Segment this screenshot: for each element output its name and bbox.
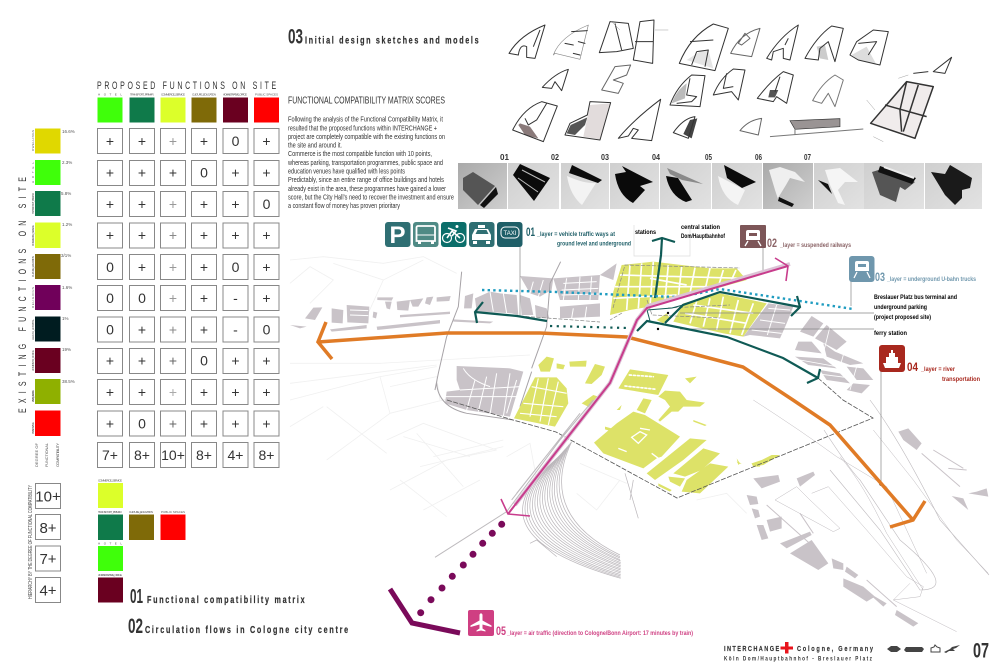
label: layer 01: ground level and underground	[557, 240, 631, 248]
hierarchy score boxes: 7+	[39, 551, 57, 568]
hierarchy score boxes: HIERARCHY BY THE DEGREE OF FUNCTIONAL COMPATIBILITY	[28, 485, 34, 599]
existing function swatches	[31, 128, 75, 467]
compatibility matrix: ++ + +0+	[106, 133, 271, 149]
base map: grey blocks south-east and east	[743, 303, 873, 393]
icon: bicycle	[441, 222, 466, 247]
leader lines	[519, 225, 883, 486]
design sketches	[509, 20, 952, 142]
existing function swatches: 1%	[62, 316, 69, 321]
label: layer 02: 02	[767, 236, 777, 250]
label: layer 01	[526, 225, 631, 248]
existing function swatches: 2.3%	[62, 160, 72, 165]
matrix scores paragraph: a constant flow of money has proven prioritary	[288, 201, 400, 210]
model numbers: 02	[551, 153, 559, 162]
section title 02	[128, 615, 348, 638]
compatibility matrix: +0 + +++	[106, 416, 271, 432]
footer transport icons	[887, 645, 960, 653]
label: layer 03: 03	[875, 270, 885, 284]
hierarchy score boxes	[28, 484, 61, 602]
compatibility matrix: 4+	[228, 447, 243, 463]
model numbers: 07	[804, 153, 811, 162]
label: central station	[681, 225, 726, 240]
compatibility matrix: ++ + 0++	[106, 352, 271, 368]
section title 02: Circulation flows in Cologne city centre	[145, 624, 348, 635]
ranked function swatches: COMMERCE_SERVICE	[98, 478, 122, 482]
icon: red cross	[780, 642, 793, 654]
existing function swatches: DEGREE OF	[34, 442, 39, 467]
model photos strip	[458, 163, 982, 209]
icon: underground train	[849, 256, 874, 282]
compatibility matrix: ++ + +++	[106, 227, 271, 243]
compatibility matrix: 7+	[102, 447, 118, 463]
label: layer 04	[907, 360, 980, 383]
heading: proposed functions on site: PROPOSED FUNCTIONS ON SITE	[97, 79, 276, 93]
existing function swatches: HEALTH_HOSPITAL	[31, 319, 35, 340]
model numbers: 03	[601, 153, 609, 162]
icon: suspended railway	[740, 225, 766, 248]
icon: parking: P	[389, 222, 406, 249]
model numbers: 06	[755, 153, 762, 162]
icon: ship	[879, 345, 905, 372]
proposed function swatches	[98, 92, 279, 122]
label: Breslauer Platz: underground parking	[874, 304, 927, 311]
proposed function swatches: TRANSPORT_PRIMAR.	[130, 92, 155, 96]
footer project title	[724, 642, 873, 663]
existing function swatches: CULTURE_EDUCATION	[31, 256, 35, 277]
existing function swatches: 1.6%	[62, 285, 72, 290]
icon: taxi sign: TAXI	[504, 231, 517, 237]
proposed function swatches: PUBLIC SPACES	[255, 92, 278, 96]
label: central station: central station	[681, 225, 720, 231]
matrix scores paragraph: Predictably, since an entire range of office buildings and hotels	[288, 175, 444, 184]
existing function swatches: COMMERCE_SERVICE	[31, 225, 35, 246]
matrix scores paragraph: Following the analysis of the Functional Compatibility Matrix, it	[288, 114, 443, 124]
compatibility matrix: +++0++	[106, 164, 271, 180]
ranked function swatches	[98, 478, 186, 602]
label: layer 01: 01	[526, 225, 535, 239]
base map: yellow zones	[514, 262, 780, 493]
compatibility matrix: 8+	[259, 447, 274, 463]
compatibility matrix: ++ + ++0	[106, 196, 271, 212]
existing function swatches: H O T E L	[31, 162, 35, 183]
compatibility matrix: 8+	[134, 447, 150, 463]
matrix scores paragraph: education venues have qualified with less points	[288, 167, 405, 176]
existing function swatches: DWELLINGS	[31, 130, 35, 151]
heading: existing functions on site: EXISTING FUNCTIONS ON SITE	[16, 177, 30, 413]
existing function swatches: 16.6%	[62, 129, 75, 134]
section title 01: 01	[130, 586, 143, 608]
hierarchy score boxes: 4+	[39, 582, 57, 600]
model numbers	[500, 153, 811, 162]
ranked function swatches: TRANSPORT_PRIMAR.	[98, 510, 123, 514]
label: layer 05: 05	[496, 624, 506, 638]
existing function swatches: 5.8%	[61, 191, 71, 196]
label: layer 03	[875, 270, 976, 284]
compatibility matrix: 10+	[161, 447, 185, 463]
icon: airplane	[468, 610, 494, 636]
label: ferry station: ferry station	[874, 330, 907, 337]
label: layer 05: _layer = air traffic (direction to Cologne/Bonn Airport: 17 minutes by train)	[506, 630, 693, 637]
existing function swatches: COMPATIBILITY	[55, 443, 60, 467]
compatibility matrix: 0+ + +0+	[106, 259, 271, 275]
icon: bus	[413, 222, 438, 247]
model numbers: 01	[500, 153, 510, 162]
section title 02: 02	[128, 615, 143, 638]
base map: dashed city boundary and river edge	[447, 265, 989, 590]
existing function swatches: 38.5%	[62, 379, 75, 384]
base map: faint streets	[290, 257, 530, 467]
matrix scores paragraph: project are completely compatible with the existing functions on	[288, 132, 445, 141]
matrix scores paragraph: already exist in the area, these programmes have gained a lower	[288, 184, 446, 193]
label: layer 01: _layer = vehicle traffic ways at	[536, 231, 616, 238]
existing function swatches: 1.2%	[62, 222, 72, 227]
label: layer 02	[767, 236, 851, 250]
label: Breslauer Platz	[874, 294, 957, 321]
ranked function swatches: CULTURE_EDUCATION	[129, 510, 153, 514]
base map: rail yard fan	[435, 400, 638, 578]
label: central station: Dom/Hauptbahnhof	[681, 234, 726, 240]
ranked function swatches: H O T E L	[98, 542, 122, 546]
matrix scores paragraph: the site and around it.	[288, 141, 342, 150]
section title 01: Functional compatibility matrix	[147, 594, 305, 605]
hierarchy score boxes: 10+	[35, 488, 61, 506]
matrix scores paragraph: whereas parking, transportation programmes, public space and	[287, 158, 443, 167]
section title 03: 03	[288, 26, 303, 48]
existing function swatches: ADMINISTR._OFFICE	[31, 350, 35, 371]
existing function swatches: 3/1%	[61, 253, 71, 258]
existing function swatches: TRANSPORT_PRIMAR.	[31, 192, 35, 214]
label: layer 04: _layer = river	[920, 366, 955, 373]
transport icons: layer 01	[385, 222, 522, 249]
compatibility matrix: 8+	[196, 447, 212, 463]
layer 03: blue dotted U-bahn route	[482, 289, 853, 309]
label: Breslauer Platz: (project proposed site)	[874, 314, 931, 321]
compatibility matrix: ++ + +++	[106, 384, 271, 400]
layer 01: teal vehicle traffic ways	[475, 238, 820, 383]
base map: grey city blocks west	[290, 262, 617, 420]
section title 03	[288, 26, 479, 48]
layer 02 and 05: magenta rail line	[501, 258, 790, 516]
hierarchy score boxes: 8+	[39, 520, 57, 537]
matrix scores paragraph	[287, 114, 454, 210]
page number: 07	[973, 640, 989, 662]
existing function swatches: RELIGIOUS	[31, 287, 35, 308]
label: Breslauer Platz: Breslauer Platz bus terminal and	[874, 294, 957, 301]
compatibility matrix: 0+ + +-0	[106, 322, 271, 338]
footer project title: Köln Dom/Hauptbahnhof - Breslauer Platz	[724, 656, 872, 663]
existing function swatches: PUBLIC SPACE	[31, 422, 35, 434]
proposed function swatches: H O T E L	[98, 92, 122, 96]
icon: taxi car	[469, 222, 494, 247]
matrix scores paragraph: score, but the City Hall's need to recover the investment and ensure	[288, 192, 454, 201]
label: layer 04: transportation	[942, 376, 980, 383]
dark dotted underground link	[550, 326, 628, 328]
matrix scores paragraph: resulted that the proposed functions within INTERCHANGE +	[288, 123, 437, 132]
section title 03: Initial design sketches and models	[305, 34, 479, 46]
footer project title: Cologne, Germany	[797, 645, 873, 653]
label: layer 05	[496, 624, 693, 638]
layer 05: purple air route	[390, 521, 505, 633]
model numbers: 04	[652, 153, 660, 162]
existing function swatches: 19%	[62, 347, 71, 352]
heading: matrix scores: FUNCTIONAL COMPATIBILITY MATRIX SCORES	[288, 96, 445, 106]
ranked function swatches: ADMINISTRATIVE_OFFICE	[98, 573, 122, 577]
proposed function swatches: CULTURE_EDUCATION	[192, 92, 216, 96]
matrix scores paragraph: Commerce is the most compatible function with 10 points,	[288, 149, 432, 158]
label: stations: stations	[635, 230, 657, 236]
section title 01	[130, 586, 305, 608]
proposed function swatches: ADMINISTRATIVE_OFFICE	[223, 92, 247, 96]
footer project title: INTERCHANGE	[724, 645, 780, 653]
compatibility matrix: 00 + +-+	[106, 290, 271, 306]
existing function swatches: PARKS_GARDENS	[31, 390, 35, 402]
existing function swatches: FUNCTIONAL	[44, 442, 49, 467]
proposed function swatches: COMMERCE_SERVICE	[161, 92, 185, 96]
ranked function swatches: PUBLIC SPACES	[161, 510, 185, 514]
label: layer 03: _layer = underground U-bahn trucks	[886, 276, 976, 283]
compatibility matrix	[98, 128, 279, 468]
layer 04: orange river route	[318, 322, 925, 527]
model numbers: 05	[705, 153, 712, 162]
label: layer 04: 04	[907, 360, 918, 374]
label: layer 02: _layer = suspended railways	[779, 242, 851, 249]
